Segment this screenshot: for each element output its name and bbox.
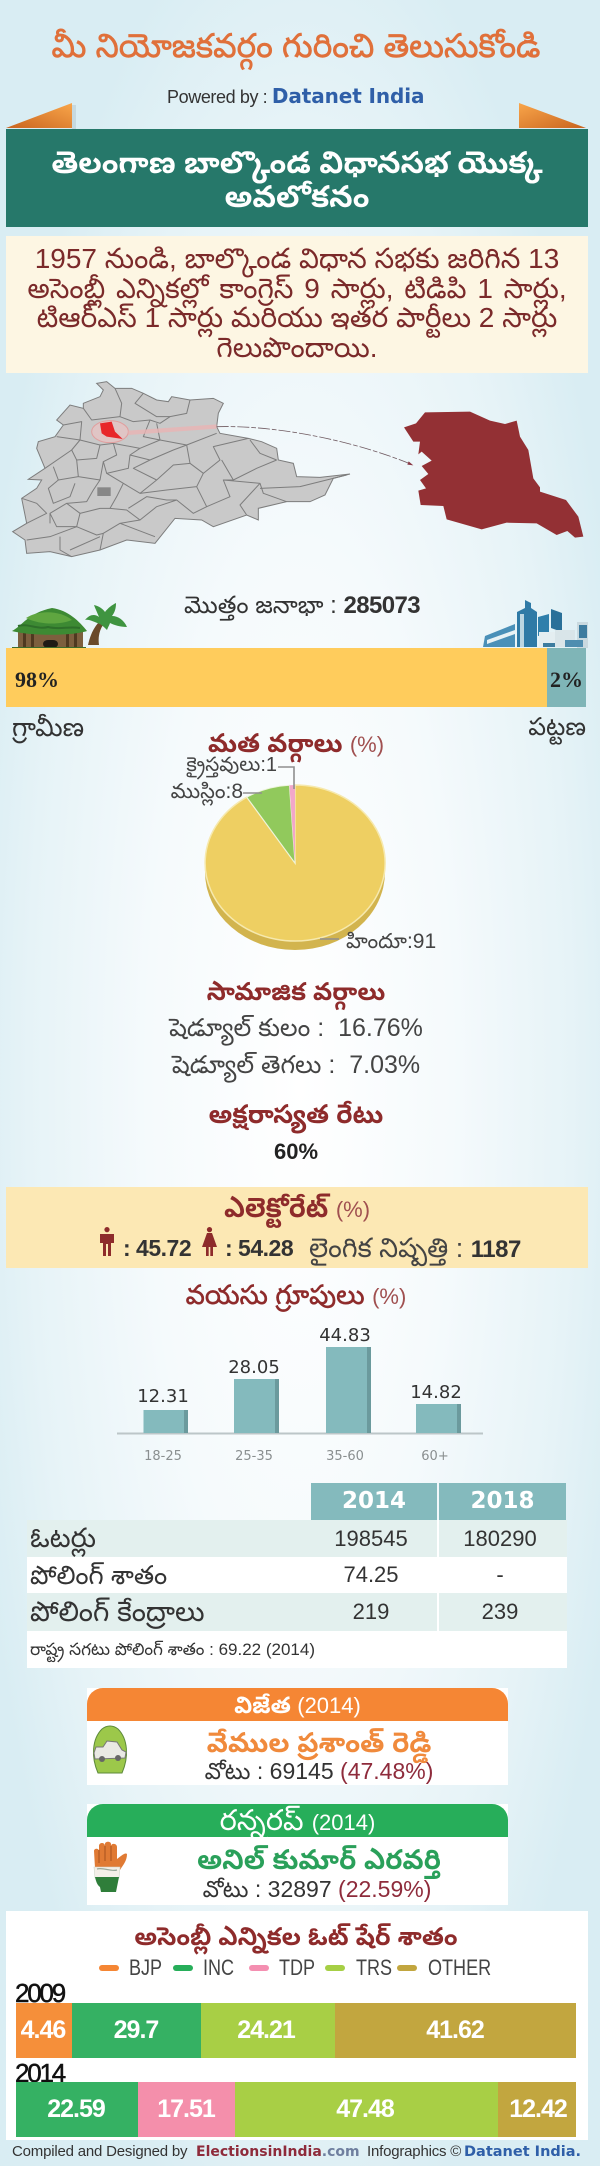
slice: christian — [289, 785, 295, 863]
runner-up header: రన్నరప్ (2014) — [220, 1805, 375, 1837]
icon: urban buildings — [483, 600, 588, 648]
summary text block: అసెంబ్లీ ఎన్నికల్లో కాంగ్రెస్ 9 సార్లు, టిడిపి 1 సార్లు, — [27, 273, 567, 304]
year label 2014: 2014 — [15, 2058, 64, 2088]
bar: 35-60: 35-60 — [326, 1449, 364, 1464]
stacked bar 2009: 24.21 — [237, 2016, 295, 2044]
pie label: hindu: హిందూ:91 — [346, 930, 436, 953]
panel: electorate — [6, 1187, 588, 1268]
runner-up name: అనిల్ కుమార్ ఎరవర్తి — [197, 1844, 441, 1875]
stacked bar 2014: 22.59 — [47, 2095, 105, 2123]
summary text block — [6, 236, 588, 373]
highlight ring — [92, 421, 217, 443]
summary text block: టిఆర్ఎస్ 1 సార్లు మరియు ఇతర పార్టీలు 2 సార్లు — [37, 302, 557, 333]
bar: 18-25 — [137, 1386, 189, 1464]
stacked bar 2009: 41.62 — [426, 2016, 484, 2044]
header: 2018: 2018 — [470, 1488, 534, 1514]
heading: age groups: వయసు గ్రూపులు (%) — [186, 1280, 406, 1310]
rural share: 98% — [15, 667, 59, 692]
row: voters — [27, 1520, 567, 1557]
footer credits: Datanet India. — [464, 2144, 581, 2160]
heading: religion: మత వర్గాలు (%) — [208, 728, 384, 758]
row: voters: 180290 — [463, 1526, 537, 1551]
stacked bar 2009: 29.7 — [114, 2016, 158, 2044]
legend: parties: TDP — [279, 1955, 315, 1980]
legend: parties — [99, 1955, 491, 1980]
bar: 25-35 — [228, 1357, 280, 1464]
footer credits — [12, 2143, 581, 2160]
row: polling percent: 74.25 — [343, 1562, 399, 1587]
row: voters: 198545 — [334, 1526, 408, 1551]
bar: 25-35: 28.05 — [228, 1357, 280, 1378]
stacked bar 2009 — [16, 2003, 576, 2058]
row: polling percent: పోలింగ్ శాతం — [30, 1560, 167, 1590]
arrow connector — [217, 427, 413, 465]
icon: INC hand symbol — [94, 1842, 127, 1892]
row: polling stations: పోలింగ్ కేంద్రాలు — [30, 1596, 205, 1627]
rural label: గ్రామీణ — [12, 712, 84, 742]
bar chart: age groups — [117, 1325, 483, 1464]
icon: TRS car symbol — [93, 1726, 127, 1774]
heading: literacy rate: అక్షరాస్యత రేటు — [209, 1099, 383, 1129]
footer credits: Infographics © — [367, 2143, 461, 2160]
banner heading: తెలంగాణ బాల్కొండ విధానసభ యొక్క — [51, 146, 543, 180]
row: voters: ఓటర్లు — [30, 1523, 96, 1553]
sex ratio: లైంగిక నిష్పత్తి : 1187 — [309, 1233, 521, 1263]
runner-up header — [87, 1804, 508, 1837]
panel: runner-up — [87, 1804, 508, 1905]
legend: parties: TRS — [356, 1955, 392, 1980]
runner-up votes: వోటు : 32897 (22.59%) — [203, 1876, 431, 1902]
bar: 60+: 60+ — [421, 1449, 449, 1464]
slice: muslim — [247, 785, 295, 863]
bar: 35-60: 44.83 — [319, 1325, 371, 1346]
banner heading: అవలోకనం — [225, 180, 369, 214]
highlighted constituency — [100, 422, 123, 439]
title: మీ నియోజకవర్గం గురించి తెలుసుకోండి — [52, 27, 540, 64]
urban share — [547, 648, 586, 707]
rural urban bar — [6, 648, 586, 707]
summary text block: 1957 నుండి, బాల్కొండ విధాన సభకు జరిగిన 13 — [35, 243, 559, 274]
pie label: muslim: ముస్లిం:8 — [171, 780, 243, 803]
row: polling stations: 219 — [353, 1599, 389, 1624]
map: state with highlighted constituency — [12, 381, 414, 558]
row: polling percent: - — [496, 1562, 504, 1587]
icon: female — [202, 1227, 217, 1256]
heading: vote share: అసెంబ్లీ ఎన్నికల ఓట్ షేర్ శాతం — [134, 1923, 458, 1951]
bar: 60+ — [410, 1382, 462, 1464]
legend: parties: INC — [203, 1955, 234, 1980]
city block — [97, 487, 111, 496]
header: 2014: 2014 — [342, 1488, 406, 1514]
banner heading — [6, 129, 588, 227]
stacked bar 2009: 4.46 — [21, 2016, 65, 2044]
slice: hindu — [205, 785, 385, 941]
header: 2014 — [311, 1483, 437, 1520]
winner name: వేముల ప్రశాంత్ రెడ్డి — [207, 1727, 431, 1758]
legend: parties: BJP — [129, 1955, 162, 1980]
row: polling stations: 239 — [482, 1599, 518, 1624]
map: constituency detail — [404, 412, 584, 538]
icon: rural hut and palm — [12, 603, 127, 648]
bar: 60+: 14.82 — [410, 1382, 462, 1403]
year label 2009: 2009 — [15, 1978, 64, 2008]
ribbon fold: right — [519, 103, 586, 128]
bar: 35-60 — [319, 1325, 371, 1464]
pie chart: religion — [204, 766, 386, 950]
header: 2018 — [439, 1483, 566, 1520]
stacked bar 2014: 12.42 — [509, 2095, 567, 2123]
female share: : 54.28 — [225, 1235, 293, 1261]
bar: 25-35: 25-35 — [235, 1449, 273, 1464]
panel: vote share — [6, 1911, 588, 2140]
row: state average note: రాష్ట్ర సగటు పోలింగ్ శాతం : 69.22 (2014) — [30, 1640, 315, 1659]
heading: electorate: ఎలెక్టోరేట్ (%) — [224, 1193, 370, 1223]
legend: parties: OTHER — [428, 1955, 491, 1980]
scheduled tribe share: షెడ్యూల్ తెగలు : 7.03% — [172, 1051, 420, 1079]
icon: male — [100, 1227, 114, 1256]
total population: మొత్తం జనాభా : 285073 — [184, 592, 420, 619]
row: polling stations — [27, 1593, 567, 1631]
winner header — [87, 1688, 508, 1721]
male share: : 45.72 — [123, 1235, 191, 1261]
stacked bar 2014: 17.51 — [157, 2095, 215, 2123]
heading: social groups: సామాజిక వర్గాలు — [207, 978, 385, 1006]
stacked bar 2014: 47.48 — [336, 2095, 394, 2123]
urban share: 2% — [550, 667, 583, 692]
ribbon fold: left — [6, 103, 76, 129]
pie label: christian: క్రైస్తవులు:1 — [186, 754, 277, 776]
bar: 18-25: 18-25 — [144, 1449, 182, 1464]
literacy value: 60% — [274, 1139, 318, 1164]
winner header: విజేత (2014) — [234, 1692, 361, 1718]
scheduled caste share: షెడ్యూల్ కులం : 16.76% — [169, 1014, 423, 1042]
winner votes: వోటు : 69145 (47.48%) — [205, 1758, 433, 1784]
table: voters and polling — [27, 1483, 567, 1668]
footer credits: ElectionsinIndia.com — [196, 2144, 360, 2160]
row: polling percent — [27, 1557, 567, 1593]
powered by line: Powered by : Datanet India — [167, 84, 424, 108]
summary text block: గెలుపొందాయి. — [216, 332, 378, 363]
row: state average note — [27, 1631, 567, 1668]
rural share — [6, 648, 547, 707]
bar: 18-25: 12.31 — [137, 1386, 189, 1407]
panel: winner — [87, 1688, 508, 1785]
urban label: పట్టణ — [528, 713, 586, 741]
footer credits: Compiled and Designed by — [12, 2143, 187, 2160]
stacked bar 2014 — [16, 2082, 576, 2137]
